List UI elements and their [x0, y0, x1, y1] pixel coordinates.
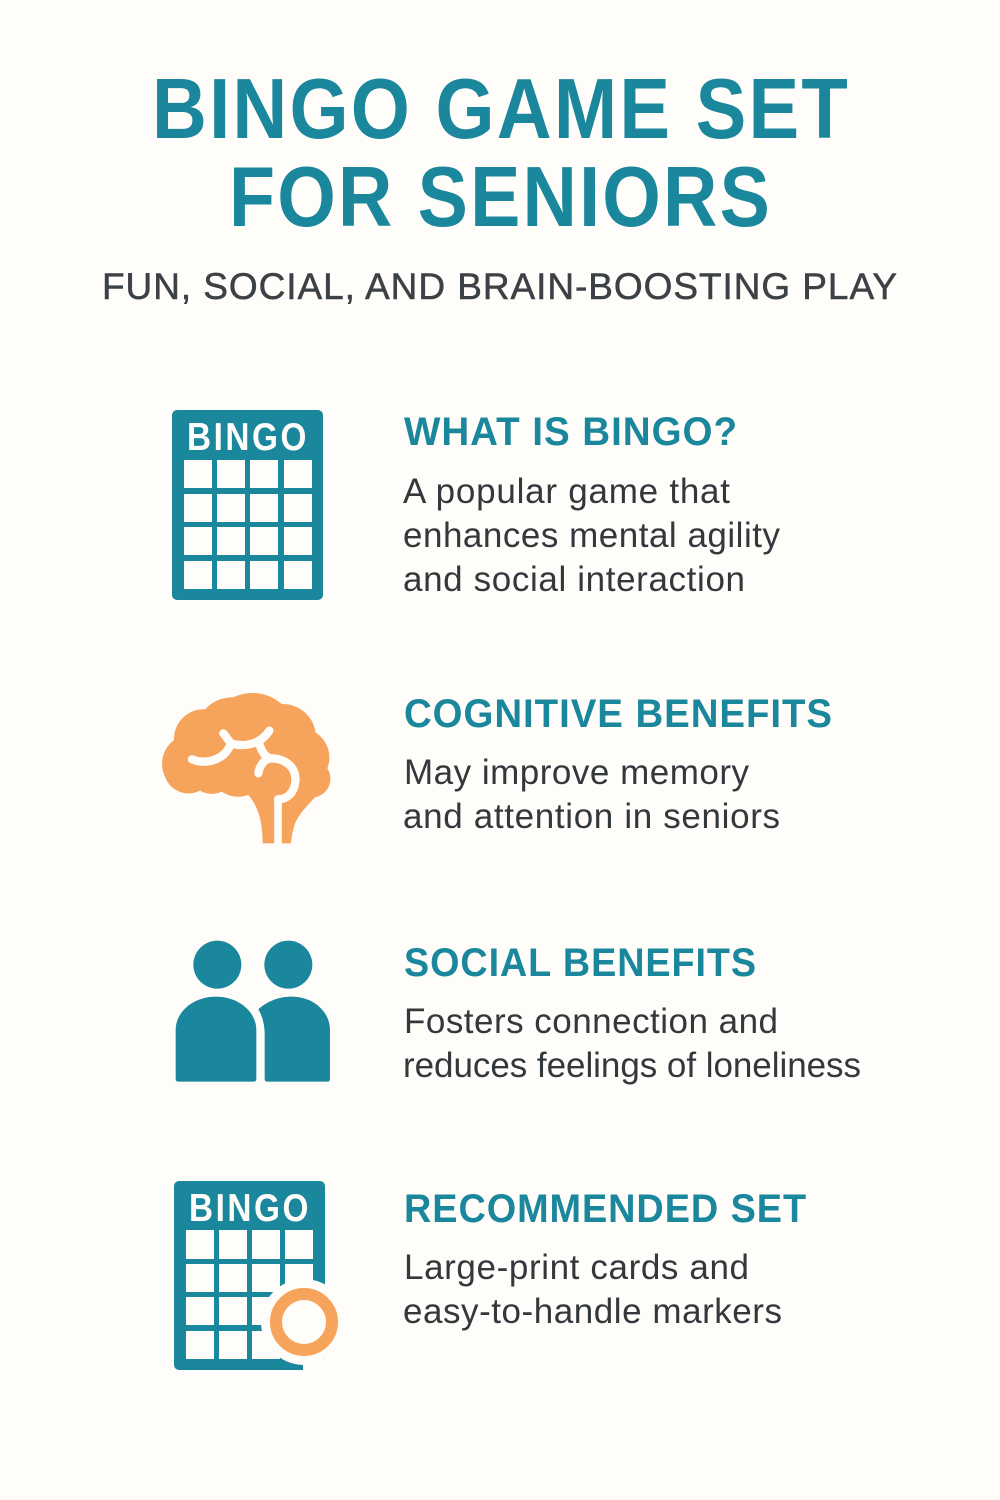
icon: two people — [176, 941, 330, 1082]
icon: bingo card with marker — [174, 1181, 347, 1374]
heading: recommended set: RECOMMENDED SET — [404, 1187, 807, 1231]
heading: what is bingo: WHAT IS BINGO? — [404, 410, 738, 454]
description: what is bingo: and social interaction — [403, 560, 745, 599]
description: what is bingo: A popular game that — [403, 472, 730, 511]
heading: cognitive benefits: COGNITIVE BENEFITS — [404, 692, 833, 736]
panel: cognitive benefits — [162, 692, 833, 844]
title — [152, 62, 850, 245]
heading: social benefits: SOCIAL BENEFITS — [404, 941, 757, 985]
description: what is bingo — [403, 472, 780, 599]
subtitle: FUN, SOCIAL, AND BRAIN-BOOSTING PLAY — [102, 266, 897, 307]
description: social benefits: reduces feelings of loneliness — [403, 1046, 861, 1085]
description: cognitive benefits — [403, 753, 780, 836]
panel: social benefits — [176, 941, 861, 1085]
icon: bingo card with marker: BINGO — [189, 1187, 311, 1230]
icon: bingo card: BINGO — [187, 416, 309, 459]
description: what is bingo: enhances mental agility — [403, 516, 780, 555]
description: recommended set: Large-print cards and — [404, 1248, 749, 1287]
description: cognitive benefits: May improve memory — [404, 753, 750, 792]
icon: bingo card — [172, 410, 323, 600]
panel: recommended set — [174, 1181, 807, 1374]
description: recommended set: easy-to-handle markers — [403, 1292, 782, 1331]
panel: what is bingo — [172, 410, 780, 600]
description: social benefits — [403, 1002, 861, 1085]
description: recommended set — [403, 1248, 782, 1331]
title: BINGO GAME SET — [152, 62, 850, 157]
description: social benefits: Fosters connection and — [404, 1002, 778, 1041]
description: cognitive benefits: and attention in seniors — [403, 797, 780, 836]
icon: brain — [162, 693, 330, 844]
title: FOR SENIORS — [229, 150, 772, 245]
